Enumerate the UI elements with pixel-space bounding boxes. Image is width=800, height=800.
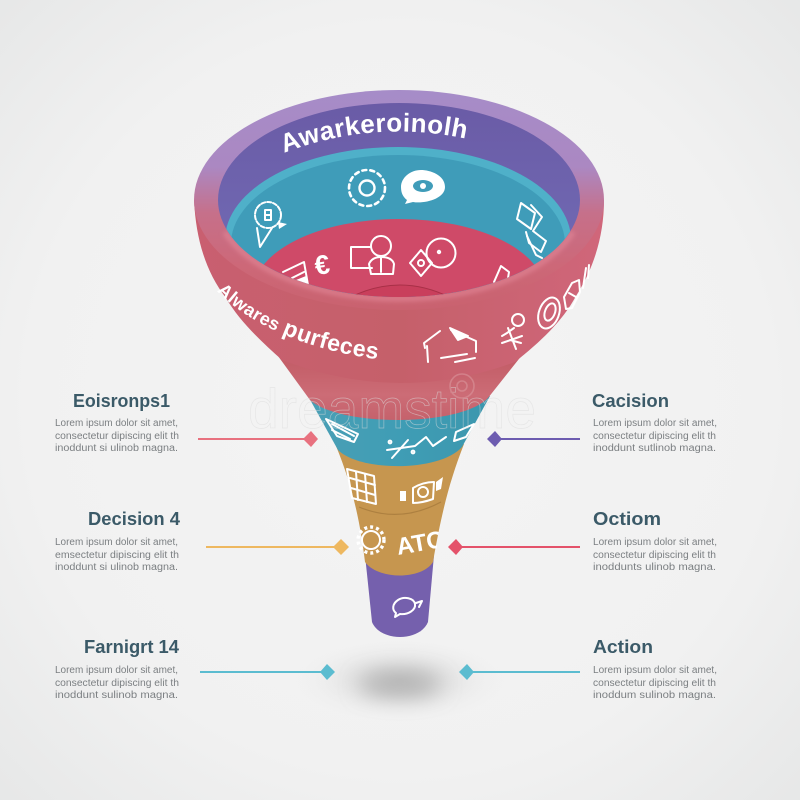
- callout: left 3: Lorem ipsum dolor sit amet,: [55, 665, 178, 676]
- icon: eye speech bubble: [401, 170, 445, 204]
- icon: pyramid: [283, 262, 308, 285]
- icon: target badge: [410, 238, 456, 276]
- callout: right 1: Cacision: [592, 391, 669, 411]
- callout: right 1: consectetur dipiscing elit th: [593, 431, 716, 442]
- icon: gear ring: [349, 170, 385, 206]
- arrow: right 2: [448, 539, 580, 555]
- inner tier: dark throat: [356, 284, 444, 297]
- inner tier: crimson: [264, 219, 534, 297]
- icon: growth line: [387, 437, 446, 458]
- funnel: [194, 90, 604, 637]
- icon: feather wing: [326, 419, 358, 442]
- callout: right 2: consectetur dipiscing elit th: [593, 550, 716, 561]
- callout: left 1: Eoisronps1: [73, 391, 170, 411]
- callout: left 2: Decision 4: [88, 509, 180, 529]
- funnel stage: purple tip: [365, 555, 434, 637]
- label: euro sign: €: [313, 249, 332, 281]
- label: inner rim text: Awarkeroinolh: [284, 112, 466, 153]
- funnel stage: teal: [308, 396, 490, 466]
- callout: right 2: inoddunts ulinob magna.: [593, 562, 716, 573]
- callout: right 3: [593, 637, 717, 701]
- callout: left 2: inoddunt si ulinob magna.: [55, 562, 178, 573]
- callout: left 1: Lorem ipsum dolor sit amet,: [55, 418, 178, 429]
- icon: badge: [255, 202, 281, 247]
- callout: left 1: inoddunt si ulinob magna.: [55, 443, 178, 454]
- callout: right 3: inoddum sulinob magna.: [593, 690, 716, 701]
- callout: left 2: emsectetur dipiscing elit th: [55, 550, 179, 561]
- callout: right 2: Octiom: [593, 509, 661, 529]
- icon: calendar grid: [347, 469, 376, 504]
- icon: speech bubble: [393, 598, 422, 617]
- icon: tag: [494, 266, 509, 284]
- funnel interior wall: [218, 103, 580, 297]
- watermark: dreamstime: [248, 377, 536, 440]
- callout: right 3: Lorem ipsum dolor sit amet,: [593, 665, 717, 676]
- funnel stage: red cone: [270, 345, 530, 420]
- callout: left 2: [55, 509, 180, 573]
- callout: left 3: Farnigrt 14: [84, 637, 179, 657]
- icon: camera: [413, 482, 434, 503]
- icon: gear figure: [502, 314, 524, 349]
- callout: right 2: Lorem ipsum dolor sit amet,: [593, 537, 717, 548]
- callout: left 3: consectetur dipiscing elit th: [55, 678, 179, 689]
- arrow: left 2: [206, 539, 349, 555]
- icon: gear: [358, 527, 384, 553]
- callout: left 1: [55, 391, 179, 454]
- icon: house arrow: [424, 328, 476, 362]
- ground shadow: [295, 638, 505, 722]
- callout: left 1: consectetur dipiscing elit th: [55, 431, 179, 442]
- callout: right 3: Action: [593, 637, 653, 657]
- inner tiers: [226, 147, 570, 297]
- callout: right 3: consectetur dipiscing elit th: [593, 678, 716, 689]
- callout: left 2: Lorem ipsum dolor sit amet,: [55, 537, 178, 548]
- icon: edge mark: [583, 265, 589, 288]
- icon: puzzle diagram: [517, 203, 546, 258]
- funnel stage: red band: [194, 200, 604, 383]
- arrow: left 1: [198, 431, 318, 447]
- icon: person with board: [351, 236, 394, 274]
- icon: target rings: [534, 295, 564, 331]
- label: ATC: ATC: [394, 526, 446, 561]
- label: front band text: Alwares purfeces: [218, 285, 378, 359]
- callout: right 1: inoddunt sutlinob magna.: [593, 443, 716, 454]
- funnel stage: orange: [336, 444, 464, 576]
- callout: left 3: inoddunt sulinob magna.: [55, 690, 178, 701]
- callout: right 2: [593, 509, 717, 573]
- inner tier: teal: [226, 147, 570, 297]
- callout: left 3: [55, 637, 179, 701]
- callout: right 1: Lorem ipsum dolor sit amet,: [593, 418, 717, 429]
- rim highlight: [225, 232, 573, 299]
- icon: paper plane: [454, 424, 474, 441]
- arrow: right 1: [487, 431, 580, 447]
- arrow: right 3: [459, 664, 580, 680]
- arrow: left 3: [200, 664, 335, 680]
- icon: rocket: [564, 280, 580, 309]
- callout: right 1: [592, 391, 717, 454]
- funnel rim: [194, 90, 604, 310]
